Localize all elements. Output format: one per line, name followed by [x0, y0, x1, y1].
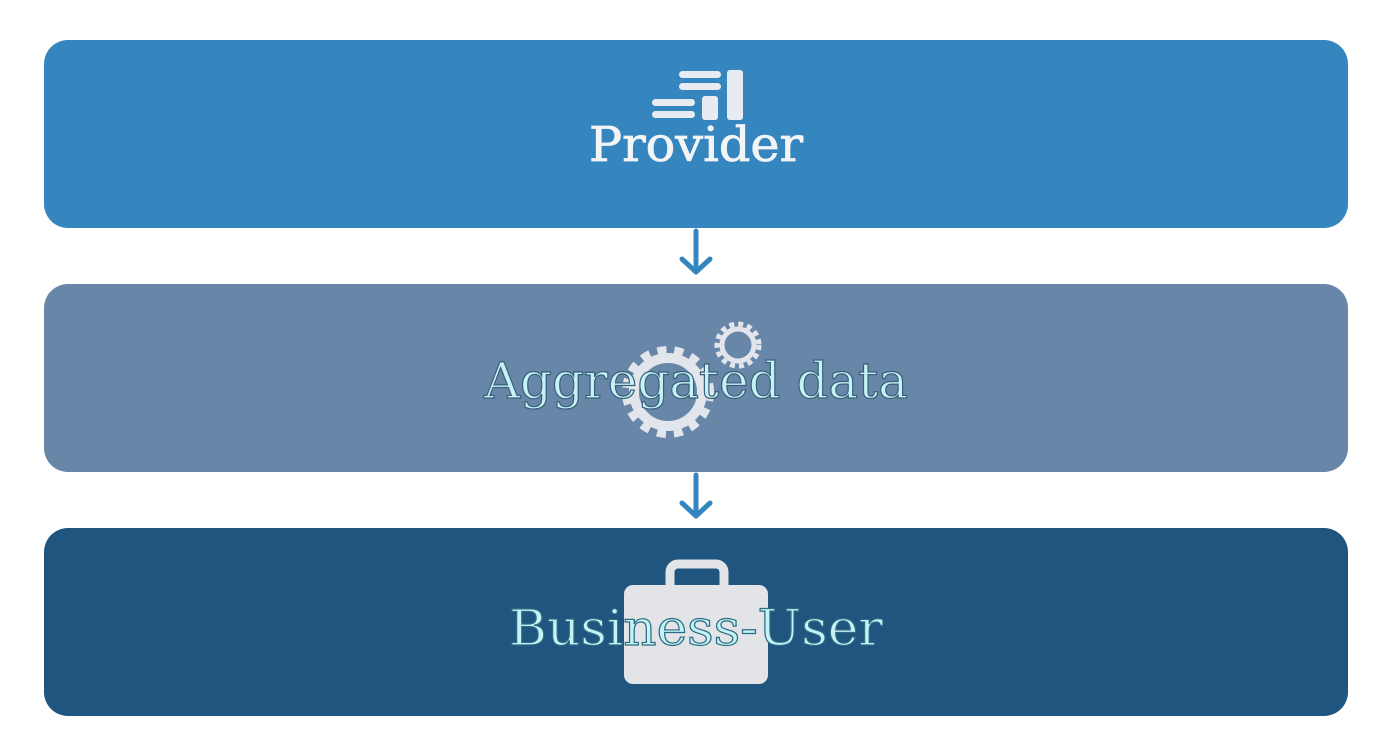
arrow 1 — [682, 231, 710, 272]
icon: gears — [626, 324, 759, 434]
icon: briefcase — [624, 564, 768, 684]
panel: provider — [44, 40, 1348, 228]
heading: Aggregated data: Aggregated data — [483, 352, 908, 410]
heading: Provider: Provider — [589, 117, 803, 173]
arrow 2 — [682, 475, 710, 516]
panel: business user — [44, 528, 1348, 716]
panel: aggregated data — [44, 284, 1348, 472]
icon: bar chart — [652, 70, 743, 120]
heading: Business-User: Business-User — [509, 599, 883, 657]
